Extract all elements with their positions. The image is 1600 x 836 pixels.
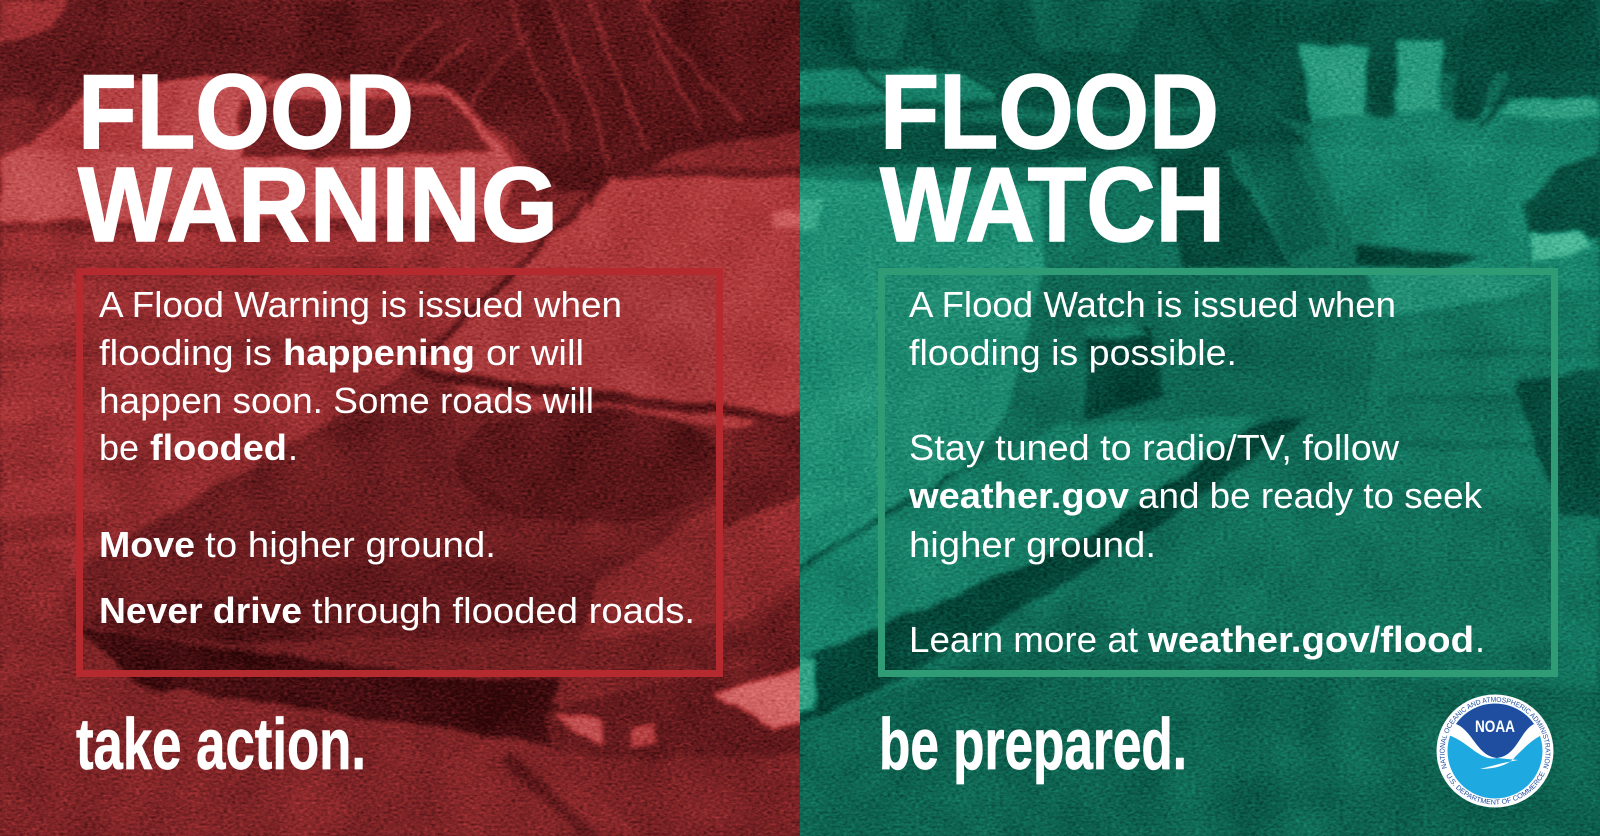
body text: actions	[99, 524, 695, 631]
panel: flood warning (red)	[0, 0, 860, 836]
text box outline	[80, 272, 720, 674]
body text: definition: be	[99, 427, 139, 468]
body text: definition	[99, 284, 622, 468]
body text: definition: happening	[283, 332, 475, 373]
panel: flood watch (green)	[800, 0, 1600, 836]
body text: stay tuned	[908, 427, 1483, 565]
heading: flood warning	[78, 53, 558, 264]
background photo tinted green	[760, 0, 1600, 836]
body text: definition: flooding is possible.	[909, 332, 1237, 373]
tagline: take action: take action.	[76, 705, 366, 785]
background photo tinted red	[0, 0, 860, 836]
heading: flood warning: FLOOD	[78, 53, 414, 171]
heading: flood warning: WARNING	[78, 146, 558, 264]
tagline: be prepared: be prepared.	[879, 705, 1187, 785]
body text: definition: flooded	[150, 427, 287, 468]
icon: NOAA logo	[1436, 694, 1554, 808]
body text: learn more: Learn more at	[909, 619, 1138, 660]
body text: definition: happen soon. Some roads will	[99, 380, 594, 421]
body text: stay tuned: and be ready to seek	[1138, 475, 1483, 516]
body text: definition: flooding is	[99, 332, 272, 373]
body text: definition	[909, 284, 1396, 373]
body text: definition: A Flood Watch is issued when	[909, 284, 1396, 325]
body text: definition: or will	[486, 332, 584, 373]
body text: actions: to higher ground.	[205, 524, 496, 565]
body text: stay tuned: weather.gov	[908, 475, 1129, 516]
icon: NOAA logo: NOAA	[1475, 717, 1515, 736]
icon: NOAA logo: NATIONAL OCEANIC AND ATMOSPHERIC ADMINISTRATION	[1440, 696, 1550, 769]
body text: definition: .	[288, 427, 298, 468]
body text: learn more: weather.gov/flood	[1147, 619, 1474, 660]
body text: definition: A Flood Warning is issued when	[99, 284, 622, 325]
heading: flood watch	[880, 53, 1225, 264]
body text: stay tuned: Stay tuned to radio/TV, follow	[909, 427, 1400, 468]
text box outline	[882, 272, 1554, 674]
heading: flood watch: WATCH	[880, 146, 1225, 264]
body text: actions: through flooded roads.	[312, 590, 695, 631]
body text: actions: Move	[99, 524, 195, 565]
body text: actions: Never drive	[99, 590, 302, 631]
heading: flood watch: FLOOD	[880, 53, 1219, 171]
body text: stay tuned: higher ground.	[909, 524, 1156, 565]
icon: NOAA logo: U.S. DEPARTMENT OF COMMERCE	[1446, 771, 1545, 804]
body text: learn more: .	[1475, 619, 1485, 660]
